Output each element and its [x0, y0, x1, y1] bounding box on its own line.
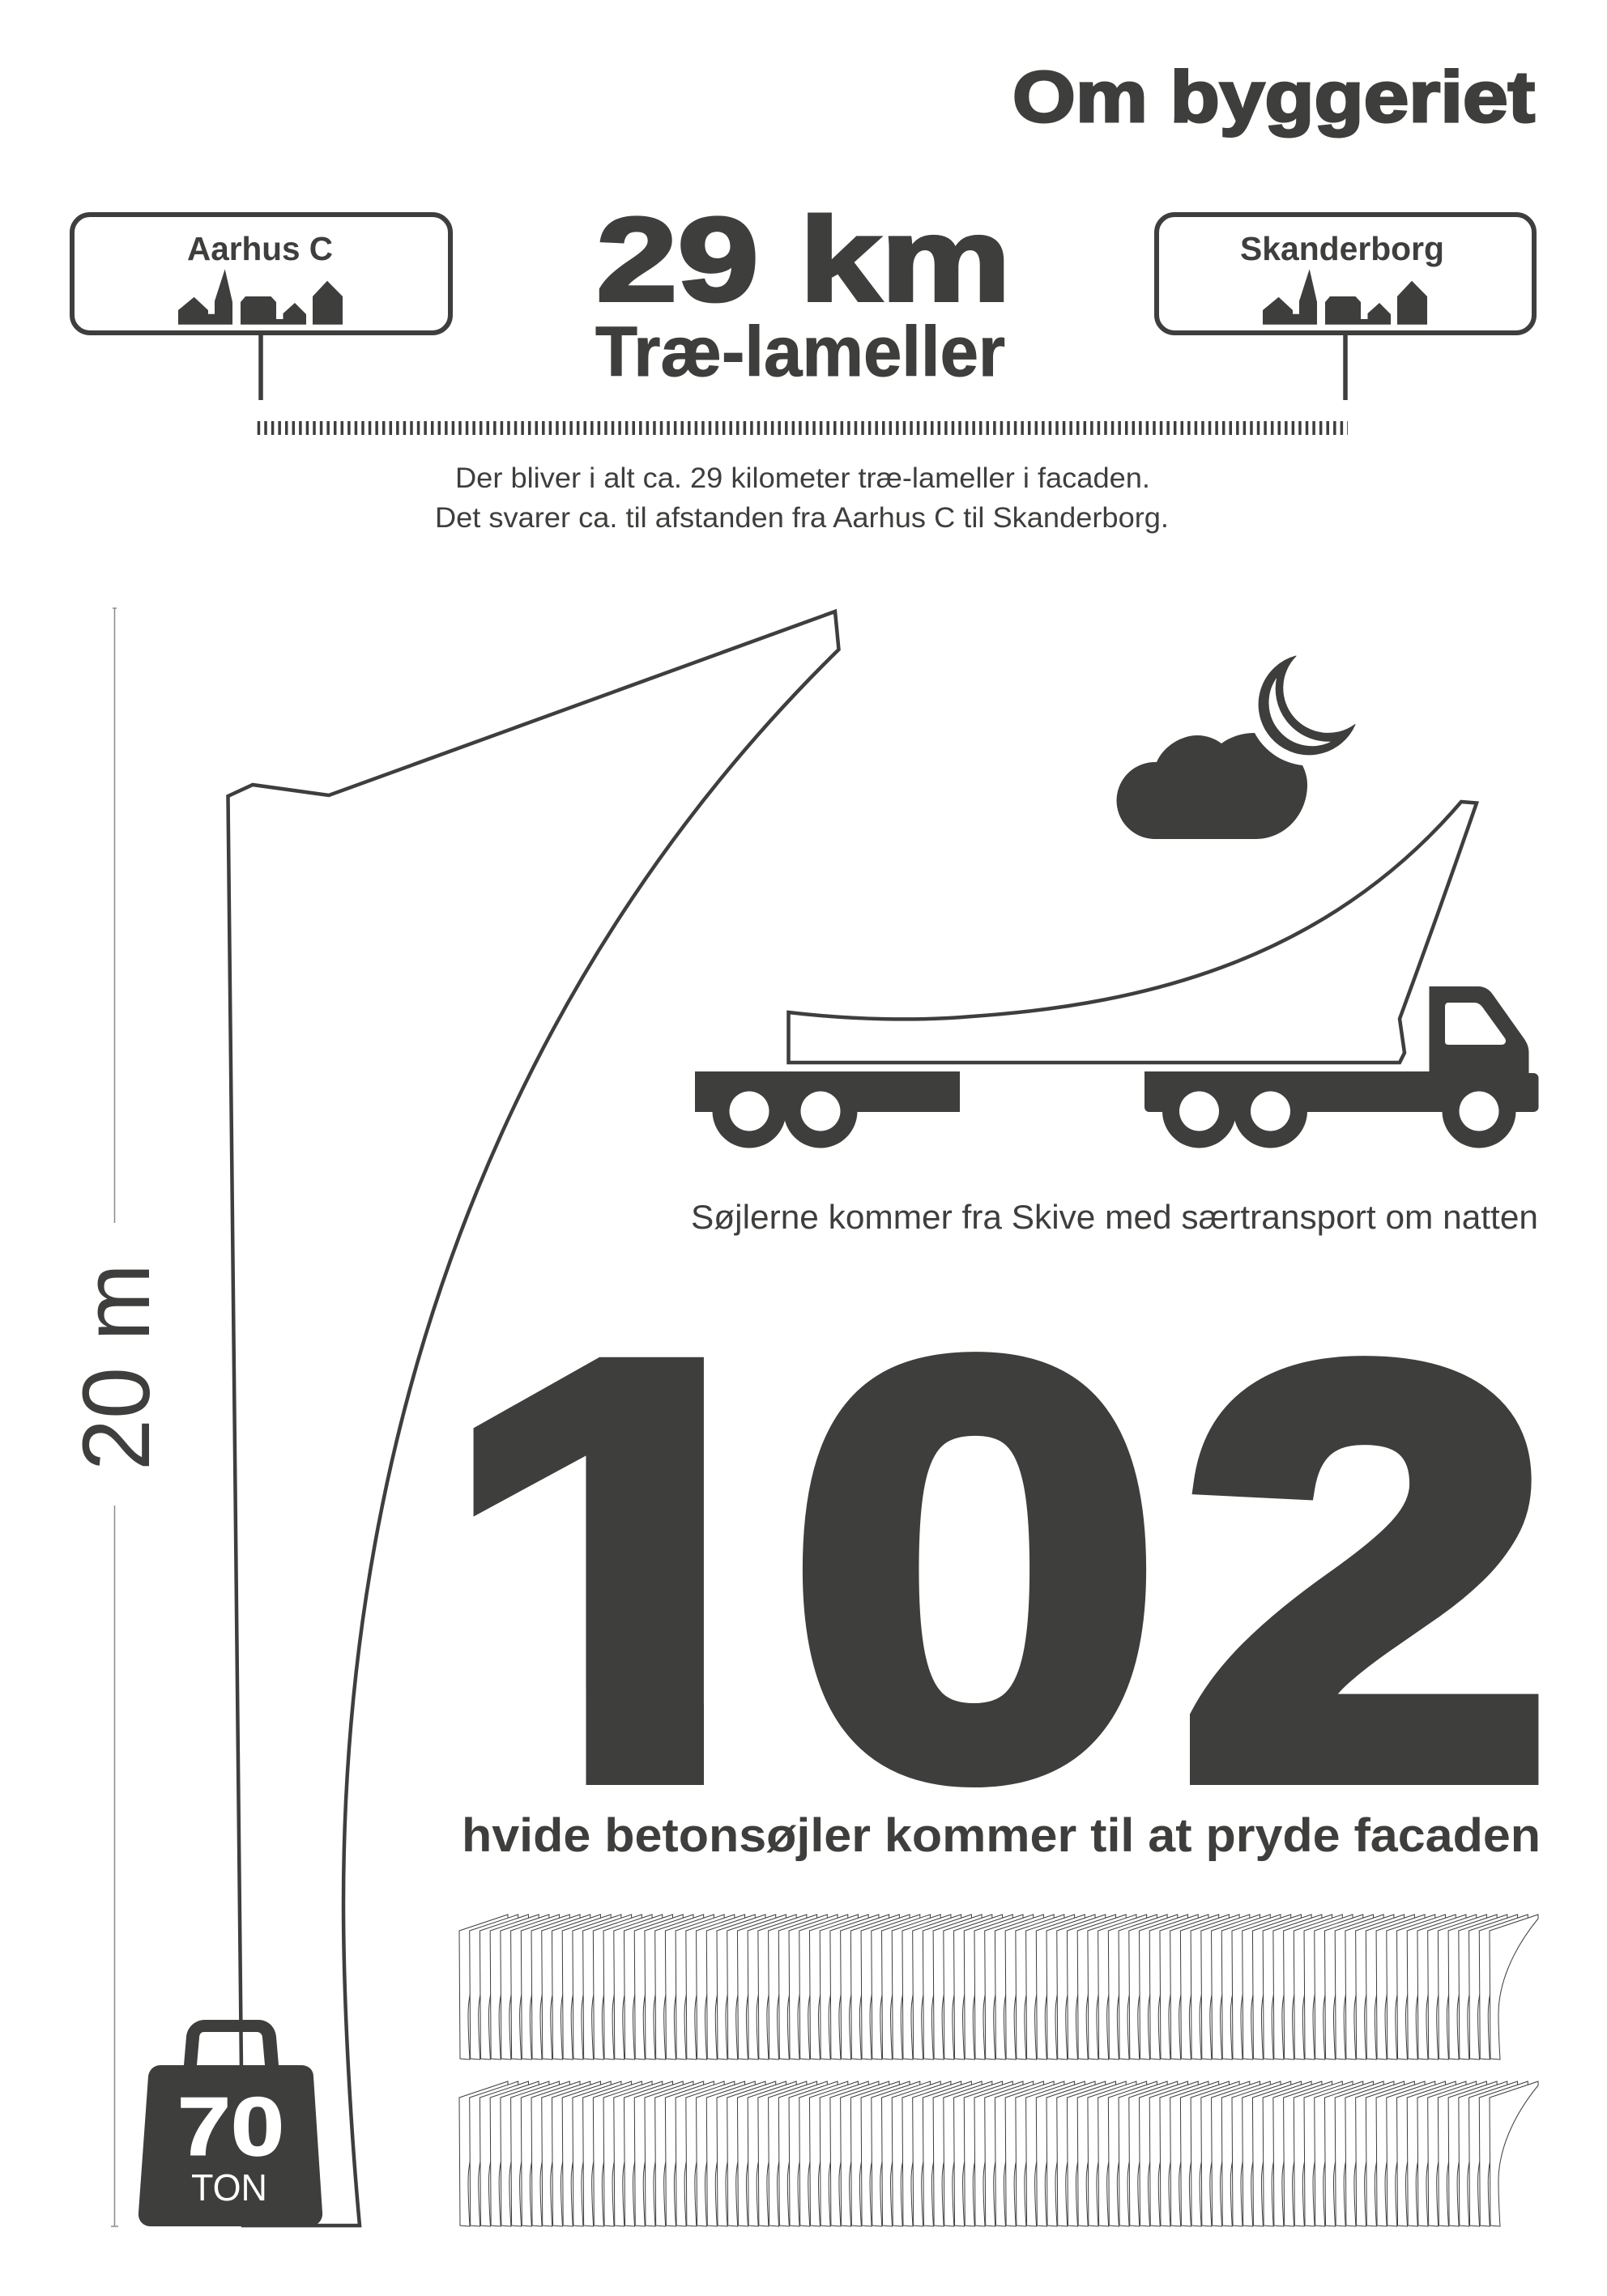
big number: 102: 0	[788, 1242, 1162, 1895]
subheading: Træ-lameller: Træ-lameller	[595, 313, 1005, 391]
road sign: Skanderborg	[1157, 215, 1534, 400]
road sign: Skanderborg: Skanderborg	[1240, 230, 1444, 267]
headline: 29 km: 29 km	[596, 194, 1011, 326]
big number: 102: 1	[439, 1239, 818, 1900]
description text	[435, 462, 1169, 534]
road sign: Aarhus C	[72, 215, 450, 400]
icon: weight 70 ton: 70	[177, 2081, 284, 2173]
height label: 20 m: 20 m	[63, 1263, 170, 1471]
big number: 102: 2	[1182, 1249, 1550, 1894]
transport: column on truck	[695, 802, 1539, 1148]
title: Om byggeriet	[1012, 56, 1535, 137]
truck	[1145, 986, 1539, 1148]
road sign: Aarhus C: Aarhus C	[187, 230, 333, 267]
pictogram: 102 columns, row 2	[459, 2081, 1538, 2226]
number caption: hvide betonsøjler kommer til at pryde facaden	[462, 1809, 1541, 1862]
tick scale: 29 km of lamellas	[258, 421, 1348, 435]
trailer	[695, 1071, 960, 1148]
concrete column outline	[228, 611, 839, 2226]
pictogram: 102 columns, row 1	[459, 1915, 1538, 2060]
icon: weight 70 ton	[139, 2020, 322, 2226]
icon: cloud	[1117, 733, 1307, 839]
description text: Det svarer ca. til afstanden fra Aarhus C til Skanderborg.	[435, 502, 1169, 534]
icon: weight 70 ton: TON	[191, 2166, 267, 2209]
big number: 102	[429, 1239, 1550, 1900]
description text: Der bliver i alt ca. 29 kilometer træ-lameller i facaden.	[455, 462, 1150, 494]
column lying on truck	[789, 802, 1477, 1063]
height dimension line	[111, 608, 118, 2226]
transport caption: Søjlerne kommer fra Skive med særtransport om natten	[691, 1198, 1538, 1236]
icon: moon	[1259, 656, 1355, 755]
